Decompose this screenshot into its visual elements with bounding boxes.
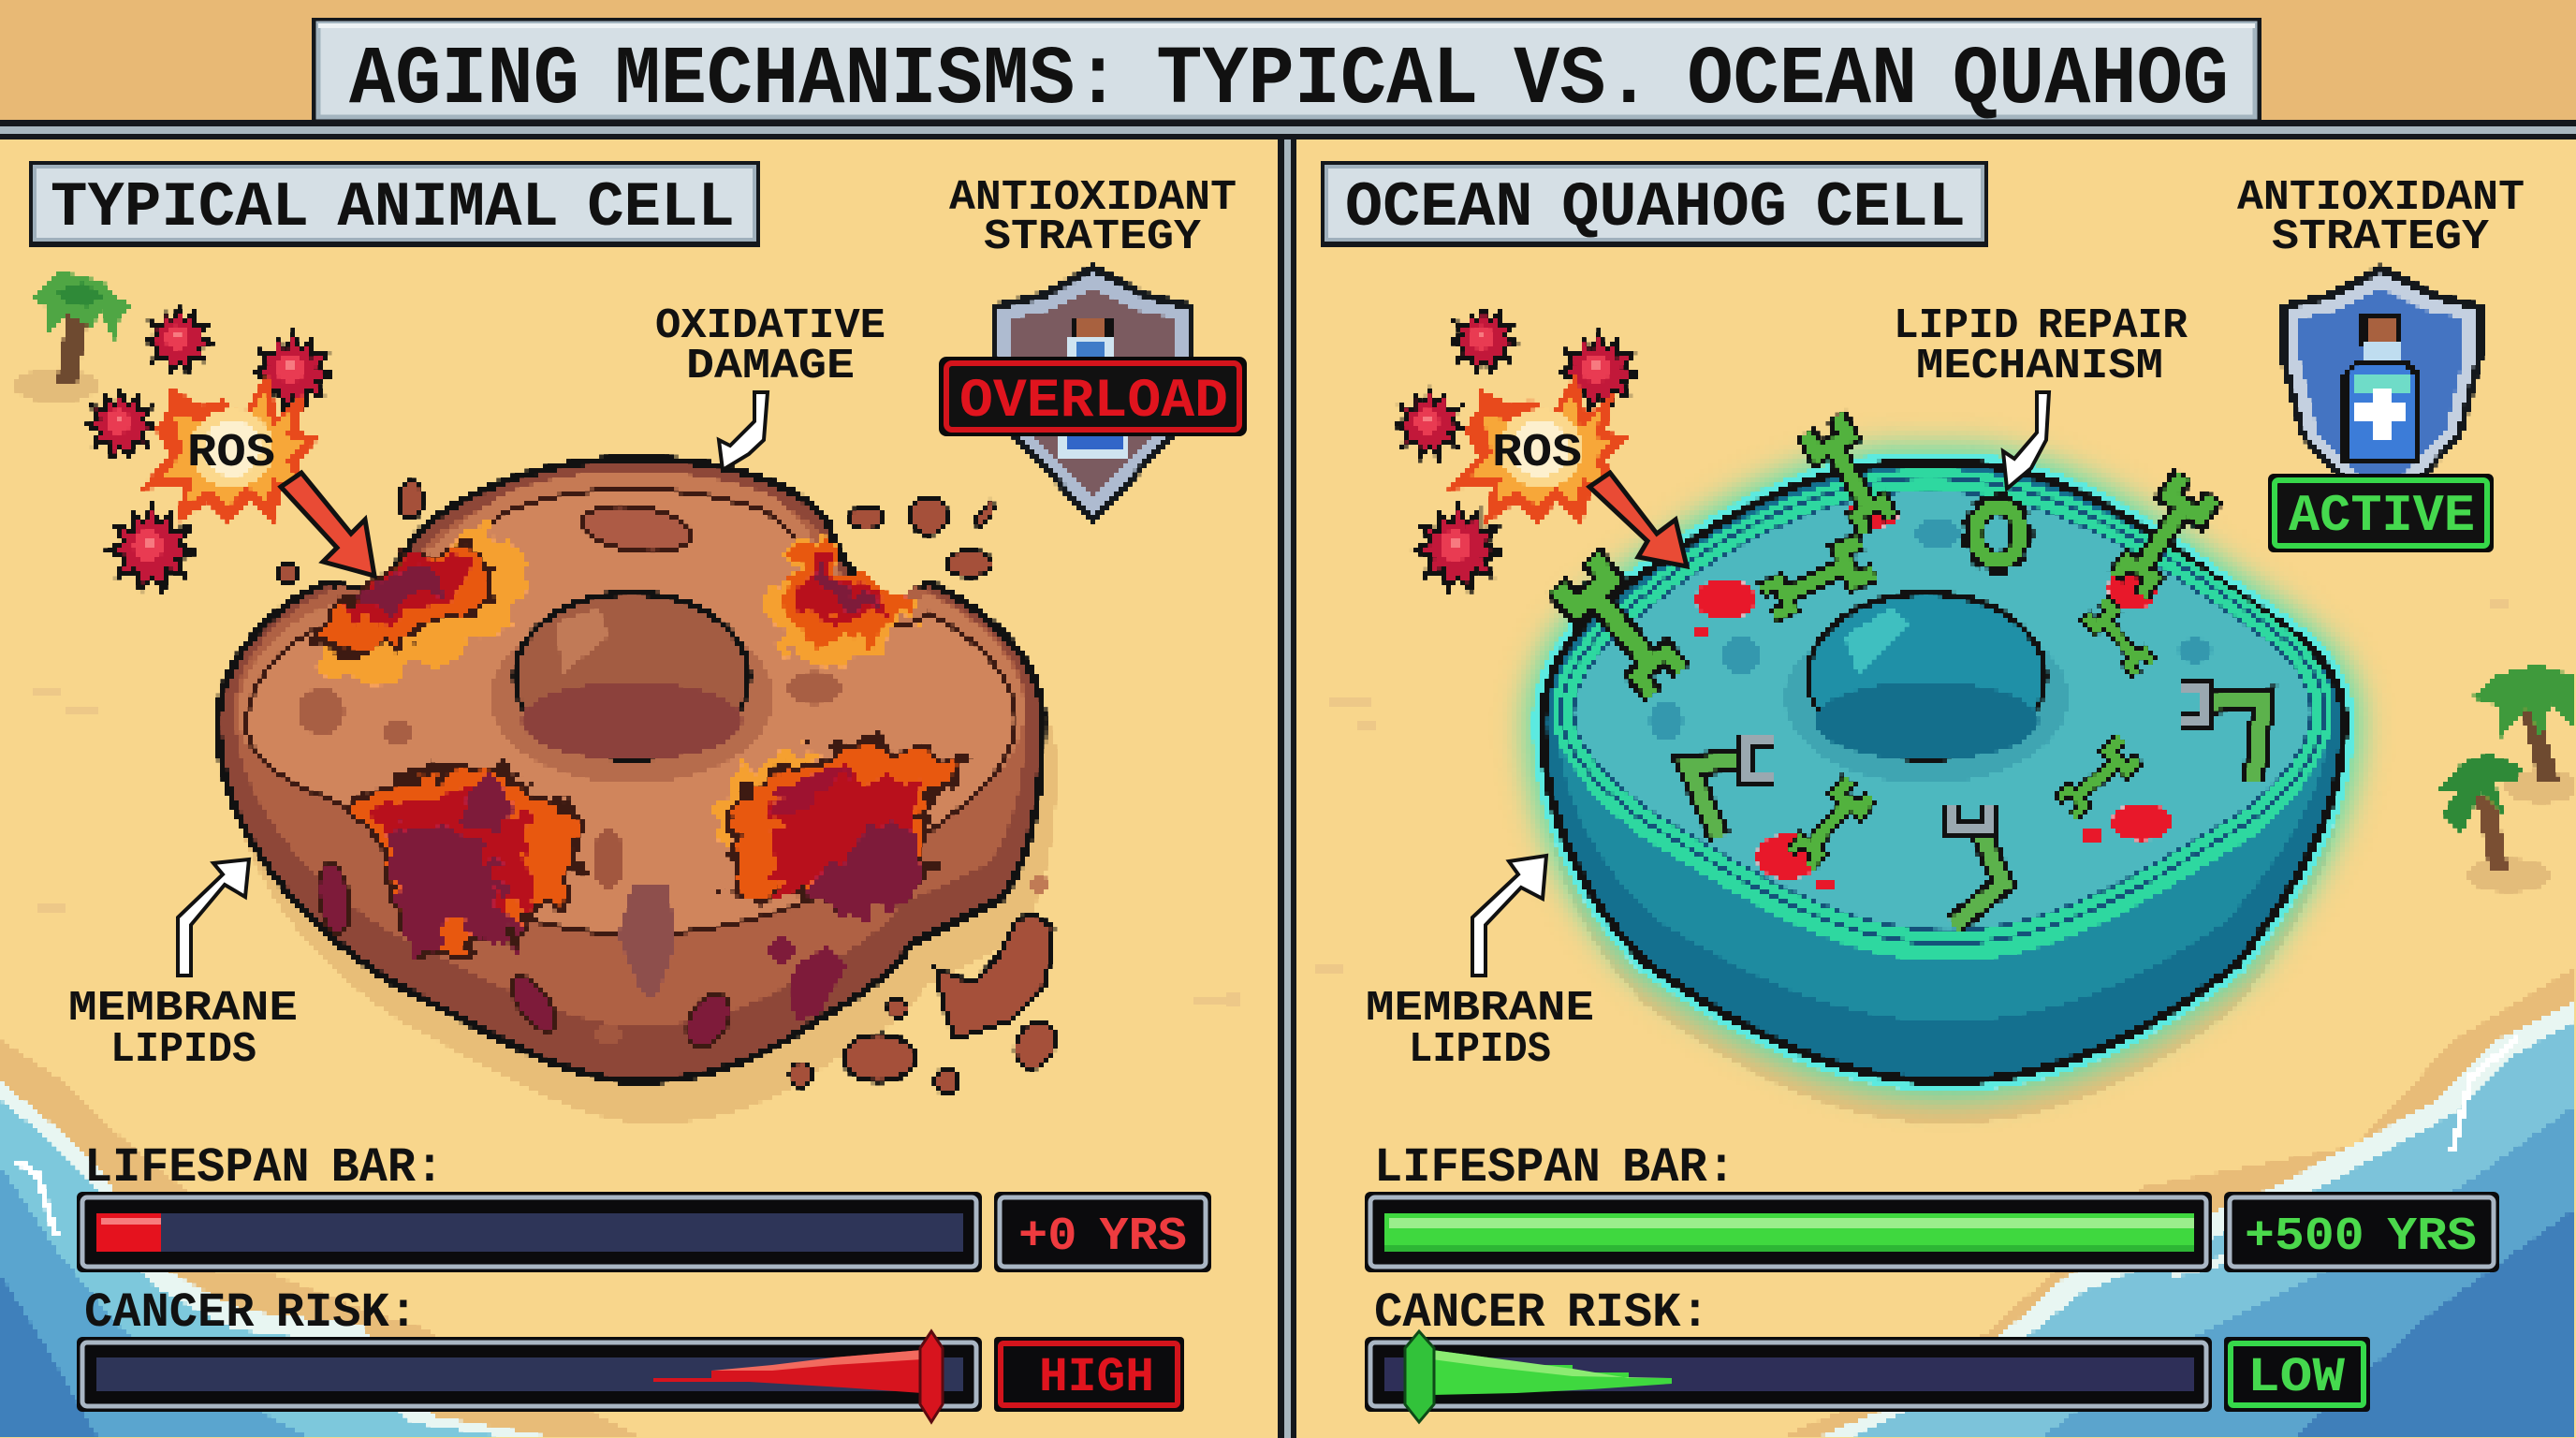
- callout: oxidative damage: OXIDATIVE: [655, 302, 886, 350]
- callout: oxidative damage: [655, 302, 886, 470]
- ground shadow: [1543, 506, 2344, 1123]
- value badge: +0 YRS: +0 YRS: [1018, 1211, 1187, 1264]
- arrow: lipid repair pointer: [2003, 392, 2049, 489]
- title banner: AGING MECHANISMS: TYPICAL VS. OCEAN QUAHOG: [349, 35, 2229, 127]
- arrow: membrane lipids pointer: [1472, 856, 1546, 976]
- antioxidant strategy label: STRATEGY: [984, 213, 1201, 261]
- panel heading: ocean quahog cell: OCEAN QUAHOG CELL: [1345, 172, 1966, 244]
- icon: shield with bottle and active badge: [2268, 264, 2494, 552]
- active badge: ACTIVE: [2289, 486, 2475, 546]
- callout: membrane lipids: MEMBRANE: [68, 985, 298, 1033]
- value badge: +0 YRS: [994, 1192, 1211, 1272]
- antioxidant strategy label: [2237, 174, 2525, 261]
- callout: lipid repair mechanism: MECHANISM: [1916, 343, 2163, 390]
- active badge: [2268, 474, 2494, 552]
- overload badge: [939, 357, 1247, 436]
- value badge: HIGH: [994, 1337, 1184, 1412]
- damage spots: [1695, 579, 1755, 620]
- illustration: healthy cell: [1543, 416, 2344, 1123]
- callout: membrane lipids: LIPIDS: [1409, 1026, 1551, 1074]
- value badge: LOW: LOW: [2247, 1350, 2346, 1405]
- risk marker: [1405, 1331, 1434, 1422]
- ROS label: ROS: [1492, 427, 1582, 480]
- icon: palm tree: [14, 270, 133, 403]
- callout: oxidative damage: DAMAGE: [686, 343, 855, 390]
- callout: membrane lipids: LIPIDS: [110, 1026, 256, 1074]
- sand speckles: [33, 599, 2509, 1006]
- callout: membrane lipids: [68, 859, 298, 1074]
- arrow: oxidative damage pointer: [719, 392, 768, 470]
- value badge: +500 YRS: +500 YRS: [2245, 1211, 2477, 1264]
- antioxidant strategy label: [949, 174, 1237, 261]
- arrow: ROS attack: [281, 473, 374, 576]
- lifespan bar: quahog: LIFESPAN BAR:: [1374, 1140, 1735, 1196]
- ocean: bottom left: [0, 1040, 640, 1438]
- lifespan bar: quahog: [1365, 1140, 2499, 1272]
- risk marker: [920, 1331, 943, 1422]
- repair arm 2: [2204, 698, 2263, 782]
- top header strip: [0, 0, 2576, 122]
- callout: lipid repair mechanism: [1894, 302, 2188, 489]
- icon: ROS molecules: [83, 303, 336, 596]
- cancer risk bar: typical: CANCER RISK:: [84, 1285, 417, 1341]
- cancer risk bar: quahog: [1365, 1285, 2370, 1422]
- nucleus: [1784, 611, 2069, 784]
- value badge: HIGH: HIGH: [1039, 1350, 1154, 1405]
- ROS label: ROS: [187, 427, 275, 480]
- panel: typical animal cell: [14, 161, 1247, 1422]
- nucleus: [490, 611, 774, 784]
- lifespan bar: typical: [77, 1140, 1211, 1272]
- callout: membrane lipids: [1366, 856, 1594, 1074]
- panel heading: typical animal cell: TYPICAL ANIMAL CELL: [51, 172, 735, 244]
- lifespan bar: typical: LIFESPAN BAR:: [84, 1140, 444, 1196]
- panel: ocean quahog cell: [1321, 161, 2576, 1422]
- icon: damaged shield with overload badge: [939, 264, 1247, 525]
- callout: lipid repair mechanism: LIPID REPAIR: [1894, 302, 2188, 350]
- organelles: [576, 497, 697, 561]
- ground shadow: [232, 501, 1057, 1123]
- debris: [399, 481, 423, 519]
- membrane rim: [1568, 506, 2317, 957]
- cancer risk bar: typical: [77, 1285, 1184, 1422]
- glow: [1543, 463, 2344, 1081]
- illustration: damaged cell: [218, 459, 1062, 1123]
- damage patches (roughened edges): [309, 529, 970, 953]
- repair tools: [1806, 416, 1895, 536]
- value badge: LOW: [2224, 1337, 2370, 1412]
- antioxidant strategy label: STRATEGY: [2272, 213, 2489, 261]
- arrow: membrane lipids pointer: [178, 859, 249, 976]
- cancer risk bar: quahog: CANCER RISK:: [1374, 1285, 1709, 1341]
- overload badge: OVERLOAD: [959, 372, 1228, 433]
- value badge: +500 YRS: [2224, 1192, 2499, 1272]
- gear: [1969, 500, 2026, 567]
- icon: ROS molecules: [1392, 303, 1642, 596]
- ocean: bottom right: [1780, 967, 2576, 1438]
- repair arm 3: [1954, 824, 2003, 925]
- side damage: [315, 861, 354, 936]
- antioxidant strategy label: ANTIOXIDANT: [949, 174, 1237, 222]
- callout: membrane lipids: MEMBRANE: [1366, 985, 1594, 1033]
- repair arm 1: [1688, 760, 1746, 838]
- organelles: [1914, 519, 1961, 549]
- antioxidant strategy label: ANTIOXIDANT: [2237, 174, 2525, 222]
- icon: palm trees: [2438, 665, 2576, 892]
- arrow: ROS attack: [1589, 473, 1687, 566]
